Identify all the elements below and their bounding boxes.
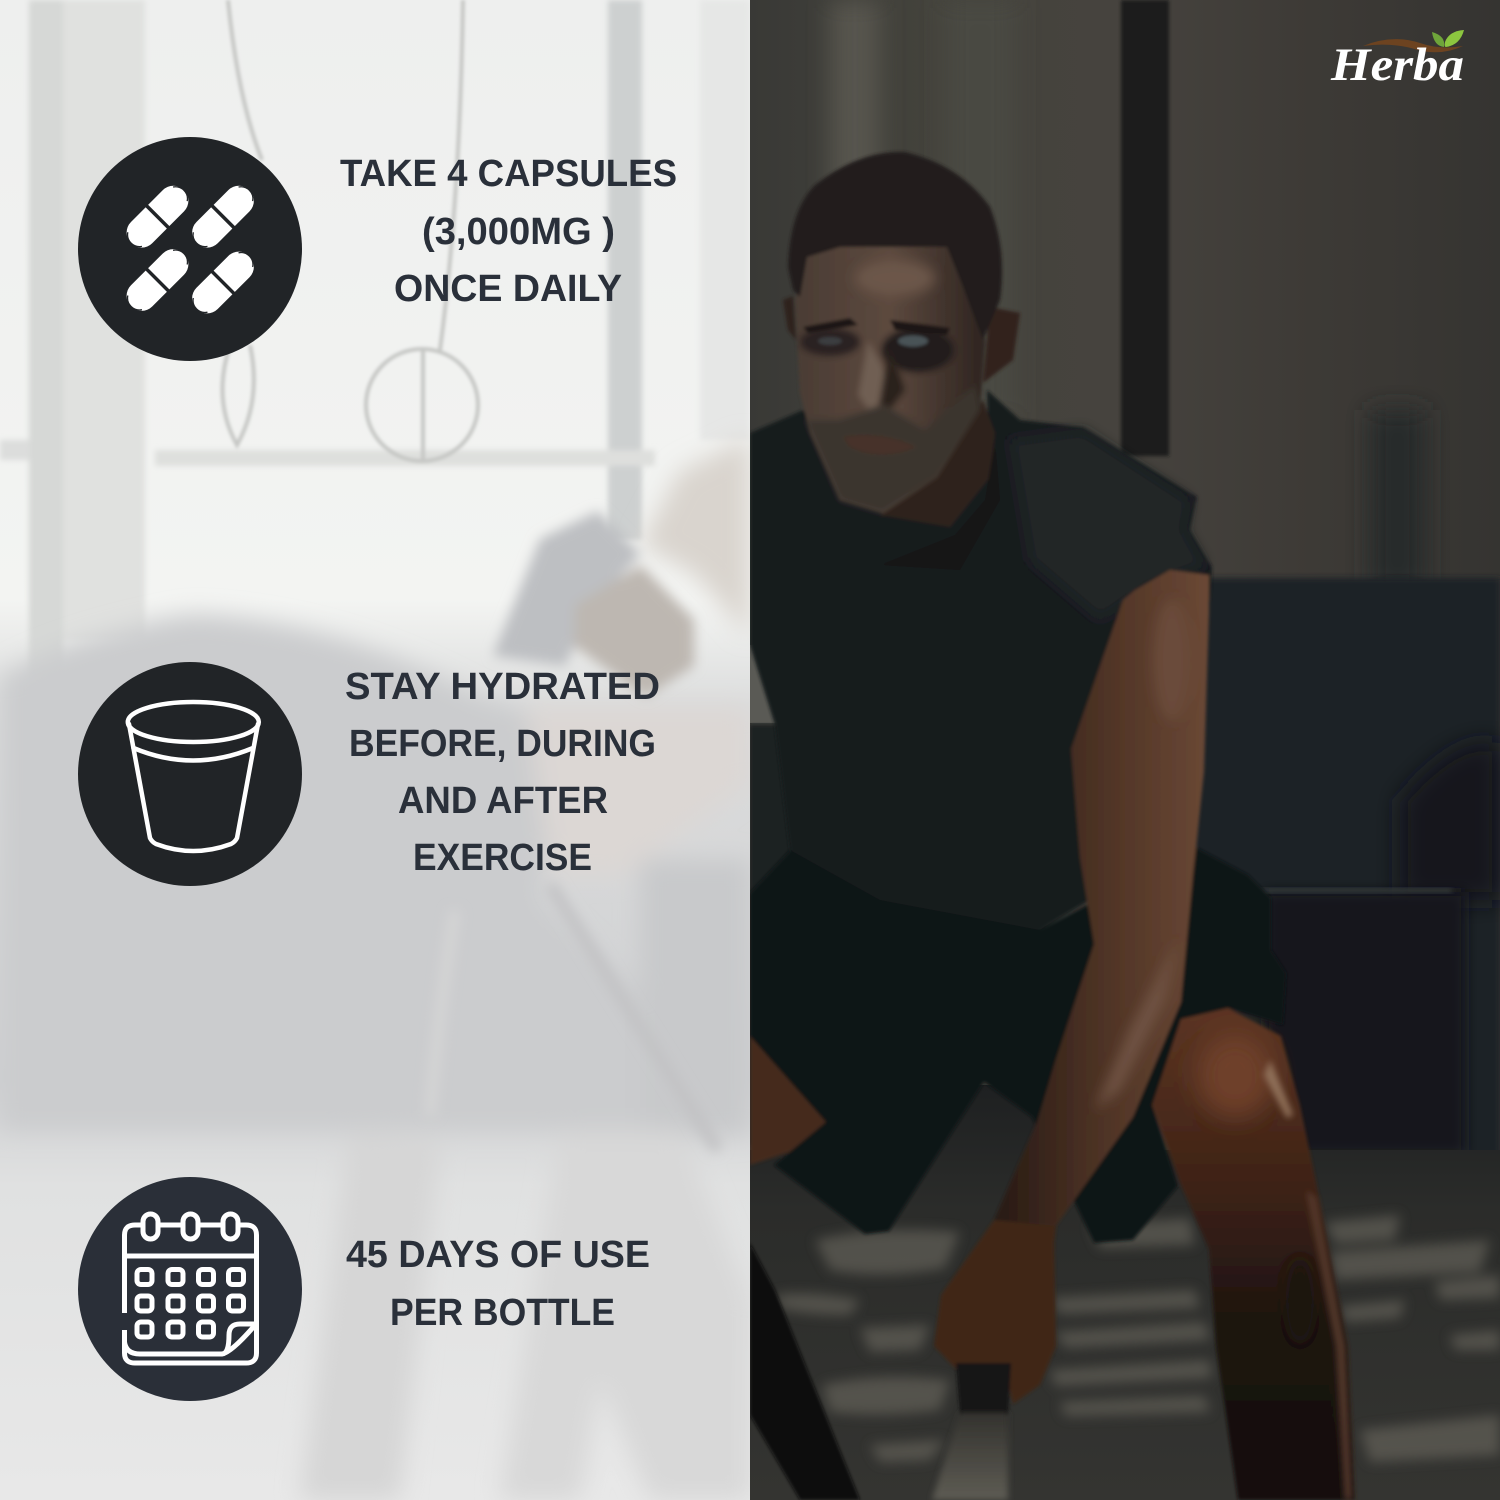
eye sockets [800,328,860,356]
text: days of use: 45 DAYS OF USE [346,1234,650,1276]
eyebrows [803,318,950,335]
text: hydration advice [345,666,660,879]
arm [994,570,1209,1226]
text: capsule dosage: (3,000MG ) [422,211,615,253]
forehead highlight [855,260,935,296]
text: capsule dosage: ONCE DAILY [394,268,622,310]
capsule 3 [120,242,195,318]
rope knot [493,511,641,666]
beard [806,385,980,513]
shirt [750,390,1212,930]
capsule 4 [185,245,261,320]
text: hydration advice: AND AFTER [398,780,608,822]
hand [574,565,694,697]
shorts [750,840,1286,1243]
text: hydration advice: STAY HYDRATED [345,666,660,708]
text: capsule dosage [340,153,677,310]
logo: Herba [1330,30,1464,91]
left thigh [750,1036,826,1165]
text: hydration advice: EXERCISE [413,837,592,879]
face [795,247,985,513]
icon: four capsules [78,137,302,361]
icon: cup of water [78,662,302,886]
right leg and knee [1152,1008,1355,1500]
text: days of use [346,1234,650,1334]
neck [880,400,995,527]
eyes [818,337,842,345]
logo wordmark: Herba [1330,39,1464,91]
hair [788,152,1002,340]
text: days of use: PER BOTTLE [390,1292,615,1334]
logo swoosh [1363,39,1463,52]
mouth [847,436,910,454]
text: capsule dosage: TAKE 4 CAPSULES [340,153,677,195]
ears [983,307,1020,383]
ropes [750,1243,1011,1500]
text: hydration advice: BEFORE, DURING [349,723,656,765]
floor with light bands [750,1085,1500,1500]
icon: calendar [78,1177,302,1401]
hand [934,1220,1056,1404]
athlete figure [750,152,1355,1500]
logo leaves [1432,30,1464,47]
photo: athlete with battle ropes [750,0,1500,1500]
capsule 2 [185,179,261,255]
capsule 1 [120,179,195,255]
nose [857,344,886,410]
panel: left information panel [0,0,750,1500]
